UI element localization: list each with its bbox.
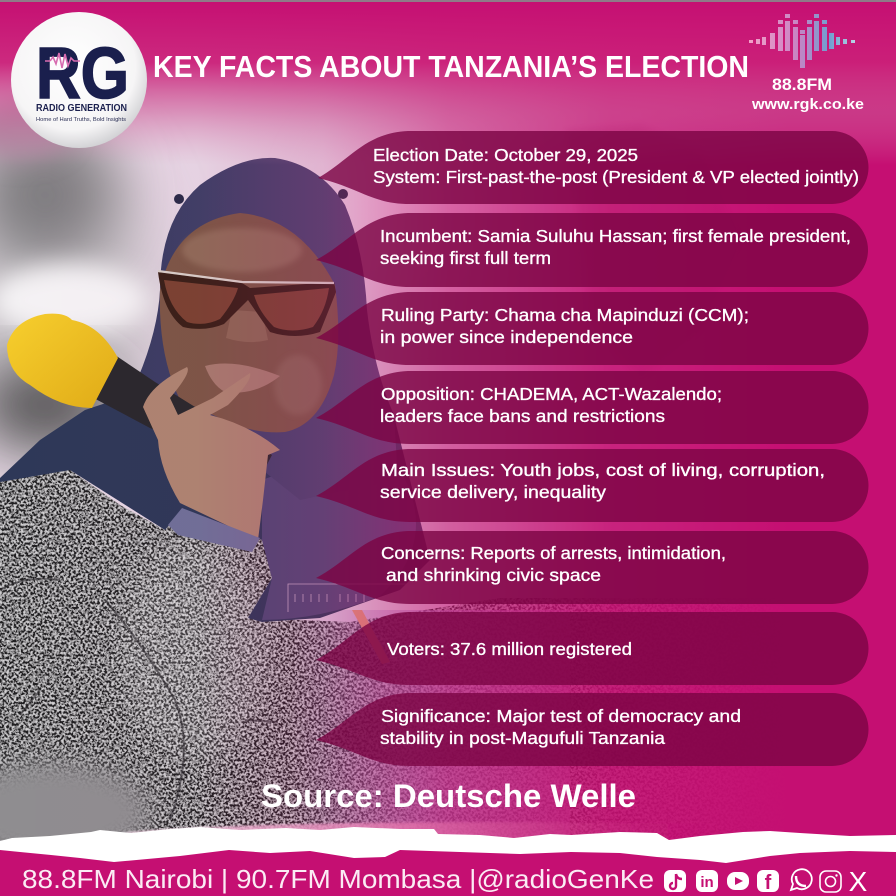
callout: main issues: Main Issues: Youth jobs, cost of living, corruption, bbox=[381, 460, 825, 480]
scarf lower drape bbox=[0, 395, 430, 622]
callout: opposition: leaders face bans and restrictions bbox=[380, 406, 665, 426]
callout: concerns: Concerns: Reports of arrests, intimidation, bbox=[381, 543, 726, 563]
light strip above torn edge bbox=[100, 822, 720, 840]
station waveform logo bbox=[749, 14, 855, 68]
icon: tiktok bbox=[664, 870, 686, 892]
icon: linkedin bbox=[696, 870, 718, 892]
icon: instagram bbox=[820, 871, 841, 892]
callout: voters bbox=[316, 612, 868, 685]
callout: ruling party: Ruling Party: Chama cha Mapinduzi (CCM); bbox=[381, 305, 749, 325]
callout: incumbent: Incumbent: Samia Suluhu Hassan; first female president, bbox=[380, 226, 851, 246]
sweater bbox=[0, 467, 896, 840]
sweater tone wash bbox=[0, 467, 896, 840]
faded building outline bbox=[288, 584, 460, 612]
callout: election date: System: First-past-the-post (President & VP elected jointly) bbox=[373, 167, 859, 187]
station frequency: 88.8FM bbox=[772, 76, 832, 94]
title: KEY FACTS ABOUT TANZANIA’S ELECTION bbox=[153, 49, 749, 84]
faint raised hand shape bbox=[566, 125, 740, 380]
callout: voters: Voters: 37.6 million registered bbox=[387, 639, 632, 659]
microphone handle bbox=[88, 353, 272, 474]
icon: whatsapp bbox=[791, 869, 812, 890]
nose bbox=[226, 310, 268, 342]
sweater fold lines bbox=[0, 579, 278, 820]
source line: Source: Deutsche Welle bbox=[261, 778, 636, 814]
icon: youtube bbox=[727, 872, 749, 890]
callout: opposition bbox=[316, 371, 868, 444]
callout: ruling party: in power since independence bbox=[380, 327, 633, 347]
callout: main issues bbox=[316, 449, 868, 522]
callout: significance: Significance: Major test of democracy and bbox=[381, 706, 741, 726]
cheek light bbox=[274, 355, 322, 415]
callout: incumbent: seeking first full term bbox=[380, 248, 551, 268]
callout: significance bbox=[316, 693, 868, 766]
callout: main issues: service delivery, inequality bbox=[380, 482, 606, 502]
logo badge: Home of Hard Truths, Bold Insights bbox=[36, 117, 126, 123]
icon: facebook bbox=[757, 870, 779, 894]
sweater cuff bbox=[168, 508, 260, 552]
callout: election date: Election Date: October 29, 2025 bbox=[373, 145, 638, 165]
callout: opposition: Opposition: CHADEMA, ACT-Wazalendo; bbox=[381, 384, 722, 404]
sweater lavender tint bbox=[290, 610, 570, 840]
callout: election date bbox=[318, 131, 868, 204]
hand bbox=[143, 367, 280, 540]
logo badge: RADIO GENERATION bbox=[36, 103, 127, 114]
hijab head wrap bbox=[138, 158, 398, 500]
lips bbox=[205, 364, 280, 393]
forehead light bbox=[182, 228, 302, 272]
station website: www.rgk.co.ke bbox=[751, 96, 864, 113]
lanyard bbox=[352, 610, 390, 664]
scarf highlight bbox=[262, 462, 416, 620]
photo: woman speaking into a microphone bbox=[0, 158, 896, 862]
callout: ruling party bbox=[316, 292, 868, 365]
icon: linkedin: in bbox=[700, 874, 714, 891]
social icons bbox=[664, 866, 868, 896]
torn paper strip bbox=[0, 827, 896, 863]
logo badge bbox=[11, 12, 147, 148]
icon: facebook: f bbox=[765, 872, 772, 894]
sunglasses bbox=[158, 271, 336, 336]
logo wave bbox=[45, 53, 80, 68]
callout: concerns: and shrinking civic space bbox=[386, 565, 601, 585]
footer text: stations and handle: 88.8FM Nairobi | 90.7FM Mombasa |@radioGenKe bbox=[22, 864, 654, 894]
footer band bbox=[0, 845, 896, 896]
hijab clips bbox=[174, 189, 348, 204]
face bbox=[160, 213, 338, 432]
logo badge: RG bbox=[36, 34, 129, 114]
bottom left blurred foreground bbox=[0, 762, 150, 862]
callout: concerns bbox=[316, 531, 868, 604]
sweater arm highlight bbox=[120, 540, 270, 760]
callout: significance: stability in post-Magufuli Tanzania bbox=[380, 728, 665, 748]
callout: incumbent bbox=[316, 213, 868, 287]
microphone foam bbox=[7, 314, 118, 408]
